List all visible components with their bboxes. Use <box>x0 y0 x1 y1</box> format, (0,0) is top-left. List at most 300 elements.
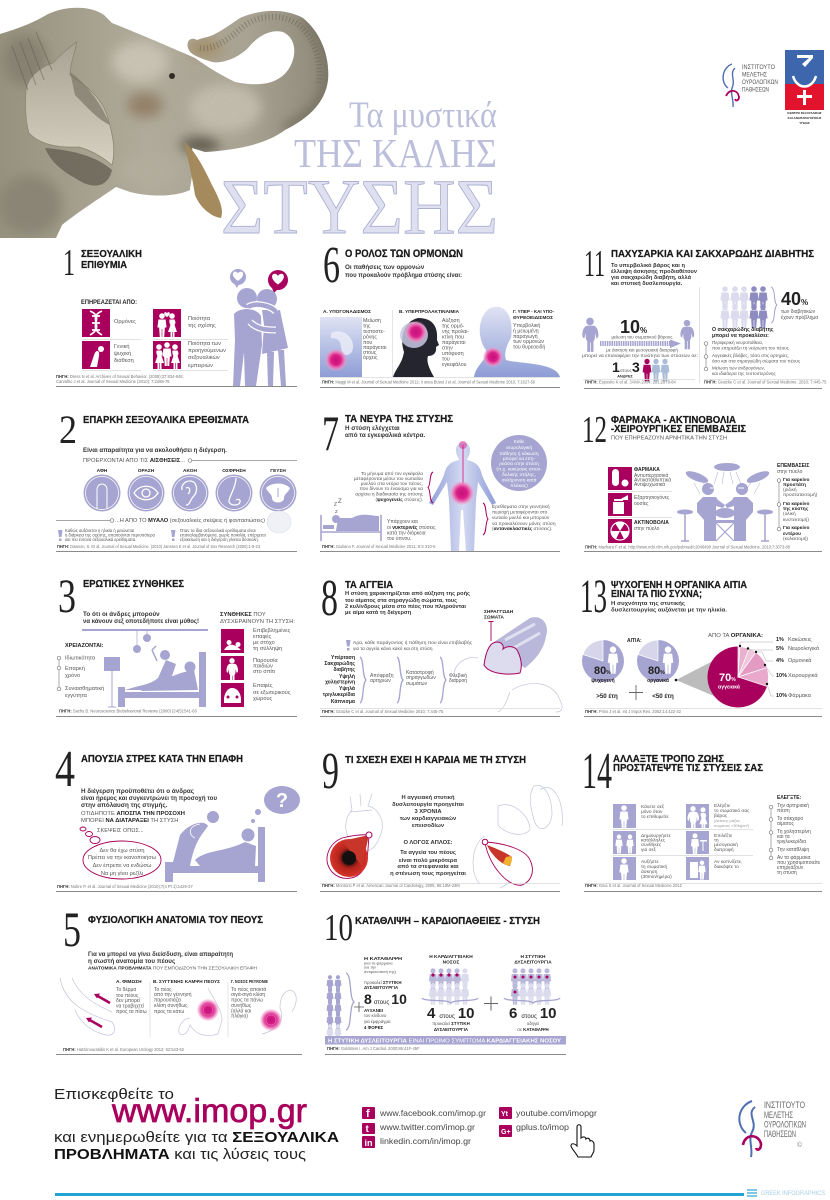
risk icons: Αντιυπερτασικά <box>634 472 668 479</box>
warnings: Όταν τα ίδια σεξουαλικά ερεθίσματα είναι <box>179 528 256 533</box>
surgery illustration <box>677 463 773 541</box>
heart disease column: ΔΥΣΛΕΙΤΟΥΡΓΙΑ <box>434 1027 469 1032</box>
intro text: 2 κυλίνδρους μέσα στο πέος που πληρούνται <box>345 604 466 610</box>
weight loss figure: με άσκηση και μεσογειακή διατροφή <box>606 346 678 352</box>
sleeping man: οι νυκτερινές στύσεις <box>387 525 436 531</box>
heading: ΠΑΧΥΣΑΡΚΙΑ ΚΑΙ ΣΑΚΧΑΡΩΔΗΣ ΔΙΑΒΗΤΗΣ <box>611 249 814 260</box>
lifestyle icons: κατάλληλες <box>641 836 666 844</box>
organic causes pie: Νευρολογικά <box>788 645 820 652</box>
risk icons: ουσίες <box>634 501 649 507</box>
callout circle: Κάθε <box>514 438 525 445</box>
cause pies: <50 έτη <box>652 693 674 700</box>
body text: είναι ήρεμος και συγκεντρώνει τη προσοχή του <box>81 795 217 802</box>
source: ΠΗΓΗ: Esposito K et al. JAMA 2004; 291:2978-84 <box>585 380 676 384</box>
footer: social links: www.twitter.com/imop.gr <box>379 1122 475 1132</box>
lifestyle icons: (Δείκτης μάζας <box>714 818 740 823</box>
problem C: Peyronie: πλάγια) <box>231 1012 248 1020</box>
logo: institute: ΜΕΛΕΤΗΣ <box>742 72 767 78</box>
sleeping man: Z <box>334 502 337 508</box>
from the mind: ...Η ΑΠΟ ΤΟ ΜΥΑΛΟ (σεξουαλικές σκέψεις ή φαντασιώσεις) <box>115 517 265 524</box>
risk factors chain: Υπέρταση <box>331 655 355 661</box>
source: ΠΗΓΗ: Montorsi P et al. American Journal of Cardiology, 2005; 96:19M-23M <box>322 883 460 888</box>
problem C: Peyronie: Το πέος αποκτά <box>231 986 266 993</box>
heading: -ΧΕΙΡΟΥΡΓΙΚΕΣ ΕΠΕΜΒΑΣΕΙΣ <box>611 424 746 435</box>
lifestyle icons: μόνο όταν <box>641 808 663 815</box>
reflexogenic note: Ερεθίσματα στην γεννητική <box>492 503 550 510</box>
check list: τριγλυκερίδια <box>777 839 806 845</box>
difficulties: στο σπίτι <box>253 669 276 675</box>
hyperprolactinemia: εγκεφάλου <box>442 361 467 368</box>
sleeping man: Υπάρχουν και <box>387 518 418 525</box>
surgeries list <box>777 463 818 542</box>
thyroid disorders: του θυρεοειδή <box>513 344 545 350</box>
diabetes complications <box>704 327 801 376</box>
body text: στην απόλαυση της στιγμής. <box>81 801 168 809</box>
organic causes pie: αγγειακά <box>718 684 741 690</box>
depression column: προκαλεί ΣΤΥΤΙΚΗ <box>364 980 402 985</box>
organic causes pie: Φάρμακα <box>788 692 812 699</box>
footer bar and credit: GREEK INFOGRAPHICS <box>761 1191 825 1197</box>
depression column: (και τα φάρμακα <box>364 960 393 966</box>
diabetes complications: Αγγειακές βλάβες, τόσο στις αρτηρίες, <box>712 352 789 358</box>
footer: social links: Yt <box>501 1111 509 1118</box>
diabetes 40 percent: των διαβητικών <box>781 308 816 315</box>
hypogonadism: στους <box>363 350 377 356</box>
logo: institute: ΟΥΡΟΛΟΓΙΚΩΝ <box>742 79 778 86</box>
footer: call to action: www.imop.gr <box>111 1092 307 1129</box>
five senses: ΟΡΑΣΗ <box>138 468 155 474</box>
five senses: ΟΣΦΡΗΣΗ <box>222 468 246 474</box>
five senses <box>84 468 296 512</box>
lifestyle icons: συνθήκες <box>641 841 662 848</box>
hyperprolactinemia: του <box>442 356 450 362</box>
callout circle: σκλήρυνση κατά <box>502 476 537 484</box>
check list: που χρησιμοποιείτε <box>777 860 821 866</box>
main title: ΤΗΣ ΚΑΛΗΣ <box>294 130 497 176</box>
influences <box>81 300 228 370</box>
weight loss figure: 1 <box>612 359 620 375</box>
sleeping man: Z <box>335 509 338 514</box>
psychogenic note: μυελού στα νεύρα του πέους, <box>361 480 423 487</box>
central text: είναι πολύ μικρότερα <box>399 858 458 864</box>
lifestyle icons: διατροφή <box>714 846 734 853</box>
risk factors chain: Κάπνισμα <box>331 699 356 705</box>
problem A: phimosis: δεν μπορεί <box>116 998 141 1004</box>
surgeries list: ΕΠΕΜΒΑΣΕΙΣ <box>777 463 809 469</box>
risk factors chain: τριγλυκερίδια <box>323 692 356 698</box>
intro text: που προκαλούν πρόβλημα στύσης είναι: <box>345 271 462 279</box>
difficulties: Παρουσία <box>253 658 278 664</box>
surgeries list: κυστεκτομή) <box>783 516 809 523</box>
weight loss figure: 10% <box>620 317 647 337</box>
conclusion bar <box>325 1036 566 1044</box>
surgeries list: (ολική <box>783 510 796 517</box>
numeral 8: 8 <box>321 570 338 627</box>
numeral 9: 9 <box>322 743 339 800</box>
hypogonadism: που <box>363 340 372 346</box>
thyroid disorders: Γ. ΥΠΕΡ - ΚΑΙ ΥΠΟ- <box>513 309 554 315</box>
thought bubble <box>80 827 161 879</box>
diabetes complications: που επηρεάζει τη νεύρωση του πέους <box>712 344 790 352</box>
source: Dress N et al. Archives of Sexual Behavior. (2008);37:834-848; <box>70 374 184 379</box>
lifestyle icons <box>613 802 753 882</box>
check list: Τη χοληστερίνη <box>777 829 811 835</box>
heading: ΕΠΙΘΥΜΙΑ <box>81 260 127 271</box>
intro text: του αίματος στα σηραγγώδη σώματα, τους <box>345 598 457 604</box>
heading: ΣΕΞΟΥΑΛΙΚΗ <box>81 249 142 260</box>
five senses: ΓΕΥΣΗ <box>270 468 286 474</box>
influences: σεξουαλικών <box>188 355 220 361</box>
risk factors chain: Σακχαρώδης <box>324 661 355 667</box>
central text: των καρδιαγγειακών <box>400 816 456 822</box>
thyroid disorders: ή μειωμένη <box>513 328 539 334</box>
influences: Ποιότητα <box>188 315 211 322</box>
hyperprolactinemia <box>392 309 469 377</box>
warnings: εξοικείωση και η διέγερση γίνεται δύσκολη. <box>180 537 259 542</box>
thyroid disorders: των ορμονών <box>513 339 544 345</box>
panel: 13 psychogenic or organic <box>580 570 822 716</box>
psychogenic note: μεταφέρονται μέσω του νωτιαίου <box>354 475 423 482</box>
couple and question cloud <box>165 786 300 882</box>
main title: Τα μυστικά <box>349 95 497 136</box>
depression column: τον κίνδυνο <box>364 1013 387 1018</box>
surgeries list: Για καρκίνο <box>783 525 809 531</box>
risk icons: Αντιψυχωσικά <box>634 481 665 488</box>
erectile dysfunction column <box>504 954 560 1032</box>
organic causes pie: ΑΠΟ ΤΑ ΟΡΓΑΝΙΚΑ: <box>708 633 763 639</box>
central text: από τα στεφανιαία και <box>397 864 459 870</box>
numeral 12: 12 <box>582 409 607 451</box>
risk icons: Αντικαταθλιπτικά <box>634 476 671 484</box>
heading: ΦΑΡΜΑΚΑ - ΑΚΤΙΝΟΒΟΛΙΑ <box>611 415 736 426</box>
main title <box>221 95 498 250</box>
diabetes 40 percent <box>720 286 818 328</box>
source: ΠΗΓΗ: Mazhara F et al. http://www.ncbi.nlm.nih.gov/pubmed/c2040498 Journal of Sexual Medicine, 2010;7:3073-88 <box>585 544 791 550</box>
organic causes pie: 70% <box>719 672 736 684</box>
footer: social links <box>362 1107 597 1148</box>
callout circle: ρεάσει στην στύση <box>499 460 539 467</box>
problem C: Peyronie <box>228 979 296 1037</box>
diabetes 40 percent: 40% <box>781 289 808 309</box>
lifestyle icons: το σωματικό σας <box>714 807 750 814</box>
influences: Ποιότητα των <box>188 340 221 347</box>
surgeries list: προστατεκτομή) <box>783 491 818 498</box>
heart disease column: ΝΟΣΟΣ <box>443 960 459 966</box>
problem A: phimosis: να τραβηχτεί <box>116 1004 145 1010</box>
hyperprolactinemia: Αύξηση <box>442 318 460 324</box>
difficulties: με στόχο <box>253 639 275 646</box>
footer logo <box>739 1100 806 1157</box>
source: ΠΗΓΗ: Gratzke C et al. Journal of Sexual Medicine. 2010; 7:445-75 <box>704 380 827 384</box>
source: ΠΗΓΗ: Giuliano F. Journal of Sexual Medicine 2011; 8:S 310-5 <box>322 544 436 549</box>
problem B: congenital curvature: παρουσιάζει <box>154 996 181 1004</box>
thought bubble: Δεν έπρεπε να ενδώσω <box>93 862 152 869</box>
heading: ΠΡΟΣΤΑΤΕΨΤΕ ΤΙΣ ΣΤΥΣΕΙΣ ΣΑΣ <box>613 763 763 774</box>
source: Carvalho J et al. Journal of Sexual Medicine (2010); 7:2468-76 <box>56 379 170 384</box>
intro text: δυσλειτουργίας αυξάνεται με την ηλικία. <box>611 608 727 614</box>
warnings: επαναλαμβανόμενα, χωρίς ποικιλία, επέρχεται <box>180 532 266 538</box>
couple in bed illustration <box>82 630 208 707</box>
footer logo: ΙΝΣΤΙΤΟΥΤΟ <box>764 1100 805 1111</box>
footer: social links: G+ <box>501 1129 511 1136</box>
body text: Η διέγερση προϋποθέτει ότι ο άνδρας <box>81 788 195 795</box>
heading: ΚΑΤΑΘΛΙΨΗ – ΚΑΡΔΙΟΠΑΘΕΙΕΣ - ΣΤΥΣΗ <box>355 916 540 927</box>
intro text: Η συχνότητα της στυτικής <box>611 601 685 607</box>
footer: social links: linkedin.com/in/imop.gr <box>380 1136 471 1146</box>
reflexogenic note: (αντανακλαστικές στύσεις). <box>492 527 552 532</box>
difficulties: σε εξωτερικούς <box>253 690 291 696</box>
heading: ΤΙ ΣΧΕΣΗ ΕΧΕΙ Η ΚΑΡΔΙΑ ΜΕ ΤΗ ΣΤΥΣΗ <box>345 755 526 766</box>
risk icons: ΑΚΤΙΝΟΒΟΛΙΑ <box>634 520 669 526</box>
heading: Ο ΡΟΛΟΣ ΤΩΝ ΟΡΜΟΝΩΝ <box>345 248 463 260</box>
check list <box>769 795 821 876</box>
source: ΠΗΓΗ: Nobre P. et al. Journal of Sexual Medicine (2010);7(4 Pt 1):1429-37 <box>57 884 193 889</box>
difficulties: Επιβεβλημένες <box>253 627 291 634</box>
lifestyle icons: διακόψτε το <box>714 863 739 870</box>
problem B: congenital curvature: Β. ΣΥΓΓΕΝΗΣ ΚΑΜΨΗ ΠΕΟΥΣ <box>153 979 220 985</box>
risk factors chain: Υψηλή <box>339 674 355 680</box>
panel: 4 absence of stress <box>55 741 300 892</box>
psychogenic note: που δίνουν το έναυσμα για να <box>360 485 423 492</box>
risk factors chain: σωμάτων <box>406 680 428 687</box>
check list: Την αρτηριακή <box>777 802 809 809</box>
hyperprolactinemia: κτίνη που <box>442 334 464 340</box>
hypogonadism: όρχεις <box>363 354 378 361</box>
footer logo: ΠΑΘΗΣΕΩΝ <box>764 1129 796 1140</box>
intro text: με αίμα κατά τη διέγερση <box>345 610 412 616</box>
corpora cavernosa illustration: ΣΗΡΑΓΓΩΔΗ <box>484 609 514 615</box>
conclusion bar: Η ΣΤΥΤΙΚΗ ΔΥΣΛΕΙΤΟΥΡΓΙΑ ΕΙΝΑΙ ΠΡΩΙΜΟ ΣΥΜΠΤΩΜΑ ΚΑΡΔΙΑΓΓΕΙΑΚΗΣ ΝΟΣΟΥ <box>328 1038 562 1044</box>
warnings: και πιο έντονα σεξουαλικά ερεθίσματα. <box>65 537 136 542</box>
panel: 3 erotic conditions <box>56 570 297 716</box>
influences: ΕΠΗΡΕΑΖΕΤΑΙ ΑΠΟ: <box>81 300 137 306</box>
footer: call to action <box>54 1086 339 1163</box>
heading: ΕΙΝΑΙ ΤΑ ΠΙΟ ΣΥΧΝΑ; <box>611 589 702 600</box>
numeral 3: 3 <box>58 570 76 623</box>
footer: social links: t <box>366 1124 370 1135</box>
heading: ΦΥΣΙΟΛΟΓΙΚΗ ΑΝΑΤΟΜΙΑ ΤΟΥ ΠΕΟΥΣ <box>88 915 263 926</box>
lifestyle icons: τη σωματική <box>641 863 667 870</box>
numeral 4: 4 <box>55 741 75 798</box>
thyroid disorders <box>474 307 560 377</box>
problem C: Peyronie: Γ. ΝΟΣΟΣ PEYRONIE <box>231 979 269 985</box>
needs list: Επαρκή <box>65 665 85 672</box>
cause pies: 80% <box>648 665 665 677</box>
couple illustration <box>230 269 288 386</box>
cause pies: ΑΙΤΙΑ: <box>627 638 642 644</box>
body text <box>81 788 217 824</box>
icon: brain <box>267 511 291 533</box>
thyroid disorders: παραγωγή <box>513 333 538 340</box>
depression column: Η ΚΑΤΑΘΛΙΨΗ <box>364 956 403 962</box>
intro text: να κάνουν σεξ οποτεδήποτε είναι μύθος! <box>83 618 199 625</box>
organic causes pie: 10% <box>776 693 787 699</box>
panel: 10 depression heart disease <box>324 907 566 1054</box>
sleeping man: Z <box>338 499 342 505</box>
footer: social links: www.facebook.com/imop.gr <box>379 1108 486 1118</box>
footer: call to action: Επισκεφθείτε το <box>54 1086 174 1103</box>
source: ΠΗΓΗ: Dawson, S. Et al. Journal of Sexual Medicine. (2010) Janssen E et al. Journal of Sex Research (2000):1-8-23 <box>57 544 261 549</box>
heading: ΑΛΛΑΞΤΕ ΤΡΟΠΟ ΖΩΗΣ <box>613 754 724 765</box>
footer logo: © <box>797 1141 803 1149</box>
problem C: Peyronie: συνήθως <box>231 1002 252 1009</box>
influences: εμπειριών <box>188 363 213 369</box>
problem B: congenital curvature: προς τα κάτω <box>154 1008 184 1015</box>
lifestyle icons: άσκηση <box>641 868 658 875</box>
panel: 7 nerves of erection <box>320 405 560 552</box>
risk icons: ΦΑΡΜΑΚΑ <box>634 467 660 473</box>
panel: 5 normal anatomy <box>56 901 302 1054</box>
lifestyle icons: Αν καπνίζετε, <box>714 859 742 865</box>
difficulties: τη σύλληψη <box>253 646 282 652</box>
lifestyle icons: βάρος <box>714 812 728 819</box>
intro text: έλλειψη άσκησης προδιαθέτουν <box>611 269 697 275</box>
risk factors chain: Υψηλά <box>339 686 356 692</box>
callout circle: πάθηση ή κάκωση <box>499 450 539 457</box>
heading: ΤΑ ΑΓΓΕΙΑ <box>345 580 393 591</box>
cause pies <box>582 638 679 700</box>
panel: 1 sexual desire <box>56 242 297 386</box>
lifestyle icons: για σεξ <box>641 847 657 853</box>
numeral 6: 6 <box>323 237 340 294</box>
thought bubble: Πρέπει να την ικανοποιήσω <box>88 854 157 861</box>
sleeping man: του ύπνου. <box>387 535 411 542</box>
surgeries list: εντέρου <box>783 531 801 537</box>
reflexogenic note: να προκαλέσουν μόνες στύση <box>492 520 556 527</box>
problem B: congenital curvature <box>150 979 222 1037</box>
organic causes pie: 5% <box>776 646 784 652</box>
reflexogenic note: νωτιαίο μυελό και μπορούν <box>492 514 550 521</box>
intro text: Το υπερβολικό βάρος και η <box>611 263 686 269</box>
source: ΠΗΓΗ: Hatzimouratidis K et al. European Urology 2012; 62:543-52 <box>63 1047 185 1052</box>
diabetes 40 percent: έχουν πρόβλημα <box>781 314 818 321</box>
heading: ΤΑ ΝΕΥΡΑ ΤΗΣ ΣΤΥΣΗΣ <box>345 414 453 425</box>
problem A: phimosis: Το δέρμα <box>116 986 136 993</box>
problem C: Peyronie: σιγά-σιγά κλίση <box>231 991 265 998</box>
organic causes pie: 1% <box>776 637 784 643</box>
problem A: phimosis <box>60 978 147 1035</box>
warnings: Καθώς αυξάνεται η ηλικία ή μειώνεται <box>65 528 134 533</box>
surgeries list: (ριζική <box>783 486 797 493</box>
difficulties: ΔΥΣΧΕΡΑΙΝΟΥΝ ΤΗ ΣΤΥΣΗ: <box>220 619 295 625</box>
diabetes complications: Μείωση των ανδρογόνων, <box>712 364 765 370</box>
depression column: ΔΥΣΛΕΙΤΟΥΡΓΙΑ <box>364 985 399 990</box>
pelvis illustration <box>473 785 562 888</box>
hypogonadism: Μείωση <box>363 318 381 324</box>
hypogonadism: τεστοστε- <box>363 329 385 335</box>
lifestyle icons: το επιθυμείτε <box>641 814 669 820</box>
depression column: για έμφραγμα <box>364 1019 391 1024</box>
heading: ΕΡΩΤΙΚΕΣ ΣΥΝΘΗΚΕΣ <box>83 579 184 590</box>
diabetes complications: μπορεί να προκαλέσει: <box>712 333 769 339</box>
plus sign <box>484 996 498 1010</box>
central text: Ο ΛΟΓΟΣ ΑΠΛΟΣ: <box>404 840 453 846</box>
depression column <box>327 956 407 1042</box>
cause pies: οργανικά <box>647 678 670 684</box>
weight loss figure: ΑΝΔΡΕΣ <box>617 374 633 378</box>
source: ΠΗΓΗ: Goldstein I. Am J Cardiol. 2000;86:41F-45F <box>327 1046 420 1051</box>
check list: επηρεάζουν <box>777 864 804 871</box>
problem A: phimosis: προς τα πίσω <box>116 1009 147 1015</box>
check list: Το σάκχαρο <box>777 815 803 822</box>
risk factors chain: Φλεβική <box>449 672 467 679</box>
difficulties <box>220 612 295 707</box>
risk factors chain: Καταστροφή <box>406 669 434 676</box>
callout circle: μπορεί να επη- <box>503 456 535 462</box>
problem C: Peyronie: προς τα πάνω <box>231 996 263 1004</box>
logo: sexual health centre: ΚΕΝΤΡΟ ΣΕΞΟΥΑΛΙΚΗΣ <box>787 111 822 115</box>
footer: social links: f <box>366 1108 370 1120</box>
organic causes pie: 4% <box>776 658 784 664</box>
thought bubble: Δεν θα έχω στύση <box>100 847 144 854</box>
intro text: η σωστή ανατομία του πέους <box>88 958 176 965</box>
source: ΠΗΓΗ: <box>56 374 69 379</box>
weight loss figure: στους <box>620 368 632 373</box>
influences: προηγούμενων <box>188 348 226 354</box>
numeral 2: 2 <box>59 407 77 452</box>
panel: 12 drugs radiation surgery: ΠΟΥ ΕΠΗΡΕΑΖΟΥΝ ΑΡΝΗΤΙΚΑ ΤΗΝ ΣΤΥΣΗ <box>611 436 727 442</box>
organic causes pie: Κακώσεις <box>788 636 812 643</box>
footer logo: ΜΕΛΕΤΗΣ <box>764 1110 793 1121</box>
check list: και τα <box>777 834 790 840</box>
problem B: congenital curvature: Το πέος <box>154 986 172 993</box>
panel: 5 normal anatomy: ΑΝΑΤΟΜΙΚΑ ΠΡΟΒΛΗΜΑΤΑ ΠΟΥ ΕΜΠΟΔΙΖΟΥΝ ΤΗΝ ΣΕΞΟΥΑΛΙΚΗ ΕΠΑΦΗ <box>88 966 257 970</box>
difficulties: χώρους <box>253 696 273 702</box>
depression column: ΑΥΞΑΝΕΙ <box>364 1008 383 1013</box>
thyroid disorders: ΘΥΡΕΟΕΙΔΙΣΜΟΣ <box>513 315 553 321</box>
organic causes pie <box>675 633 820 708</box>
panel: 11 obesity and diabetes <box>582 243 827 388</box>
risk icons <box>608 467 672 543</box>
risk factors chain <box>323 655 467 705</box>
difficulties: Επαφές <box>253 682 273 689</box>
surgeries list: Για καρκίνο <box>783 501 809 507</box>
callout circle: νευρολογική <box>506 444 532 451</box>
lifestyle icons: τη <box>714 838 719 844</box>
corpora cavernosa illustration <box>454 609 562 712</box>
logo: sexual health centre: ΥΓΕΙΑΣ <box>799 121 810 125</box>
cause pies: ψυχογενή <box>591 678 615 684</box>
intro text: Η στύση χαρακτηρίζεται από αύξηση της ροής <box>345 591 470 597</box>
needs list: Ιδιωτικότητα <box>65 654 96 662</box>
depression column: 4 ΦΟΡΕΣ <box>364 1025 384 1030</box>
intro text: για σακχαρώδη διαβήτη, αλλά <box>611 275 692 281</box>
footer bar and credit <box>55 1189 825 1197</box>
surgeries list: προστάτη <box>783 482 806 488</box>
hypogonadism: Α. ΥΠΟΓΟΝΑΔΙΣΜΟΣ <box>323 309 371 315</box>
weight loss figure: 3 <box>632 359 640 375</box>
erectile dysfunction column: Η ΣΤΥΤΙΚΗ <box>520 954 546 960</box>
hyperprolactinemia: νης προλαι- <box>442 329 469 335</box>
central text: η στένωση τους προηγείται <box>390 871 466 877</box>
hyperprolactinemia: παράγεται <box>442 339 466 346</box>
surgeries list: (κολεκτομή) <box>783 535 808 542</box>
surgeries list: Για καρκίνο <box>783 477 809 483</box>
logo: institute: ΙΝΣΤΙΤΟΥΤΟ <box>742 64 775 71</box>
check list: αίματος <box>777 821 794 827</box>
footer: social links: gplus.to/imop <box>516 1122 569 1132</box>
logo: sexual health centre <box>785 50 824 125</box>
cause pies: 80% <box>594 665 611 677</box>
intro text: Για να μπορεί να γίνει διείσδυση, είναι απαραίτητη <box>88 951 233 958</box>
depression column: 8 στους10 <box>364 991 407 1007</box>
heart disease column <box>422 954 478 1032</box>
difficulties: ΣΥΝΘΗΚΕΣ ΠΟΥ <box>220 612 266 618</box>
footer: social links: in <box>364 1138 372 1148</box>
psychogenic note: αρχίσει η διαδικασία της στύσης <box>355 490 424 498</box>
needs list: Συναισθηματική <box>65 685 104 692</box>
reflexogenic note: περιοχή μεταφέρονται στο <box>492 508 548 516</box>
